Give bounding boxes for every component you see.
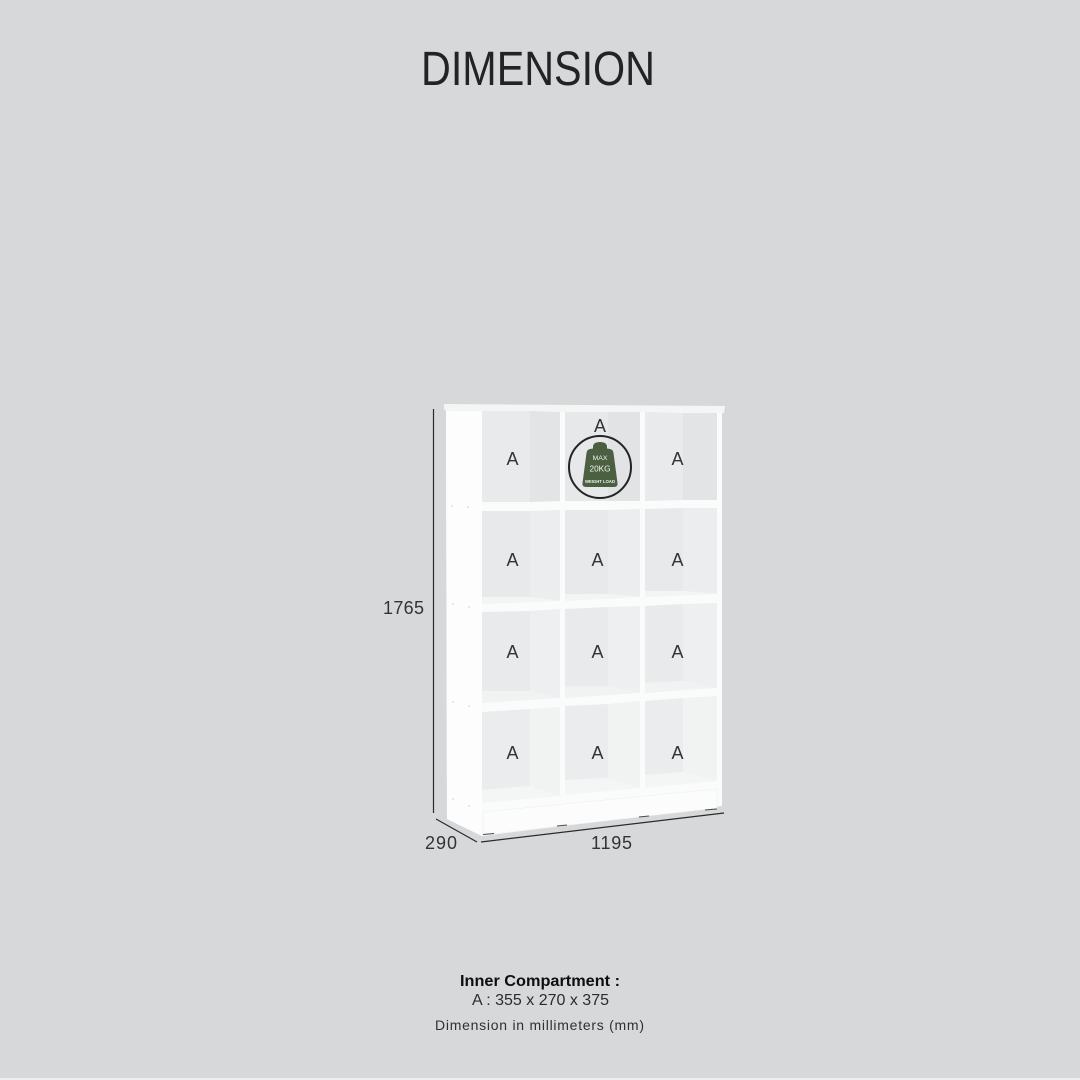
compartment labels A: A [506, 743, 519, 763]
compartment labels A: A [591, 550, 604, 570]
inner compartment size: A : 355 x 270 x 375 [472, 992, 609, 1009]
feet marks [483, 809, 717, 834]
icon: max weight load [569, 436, 631, 498]
shelf body [446, 411, 722, 836]
compartment labels A: A [506, 550, 519, 570]
icon: max weight load: 20KG [590, 464, 610, 474]
row 1 compartments [482, 411, 717, 502]
width dimension [481, 813, 724, 853]
compartment labels A: A [671, 449, 684, 469]
row 3 compartments [482, 603, 717, 703]
compartment labels A: A [671, 743, 684, 763]
compartment labels A: A [591, 642, 604, 662]
depth dimension [425, 819, 477, 853]
compartment labels A [506, 416, 684, 763]
plinth [483, 789, 717, 835]
icon: max weight load: WEIGHT LOAD [585, 479, 615, 484]
compartment labels A: A [671, 642, 684, 662]
bookshelf illustration [444, 404, 725, 836]
row 4 compartments [482, 696, 717, 803]
height dimension: 1765 [383, 598, 424, 618]
compartment labels A: A [506, 449, 519, 469]
unit note: Dimension in millimeters (mm) [435, 1017, 644, 1033]
side panel [446, 411, 482, 836]
row 2 compartments [482, 508, 717, 604]
top panel [444, 404, 725, 413]
compartment labels A: A [594, 416, 606, 436]
depth dimension: 290 [425, 833, 457, 853]
inner compartment heading: Inner Compartment : [460, 973, 620, 990]
compartment labels A: A [671, 550, 684, 570]
title: DIMENSION [421, 43, 655, 96]
icon: max weight load: MAX [592, 455, 608, 462]
compartment labels A: A [506, 642, 519, 662]
width dimension: 1195 [591, 833, 632, 853]
compartment labels A: A [591, 743, 604, 763]
side panel dots [451, 505, 470, 807]
